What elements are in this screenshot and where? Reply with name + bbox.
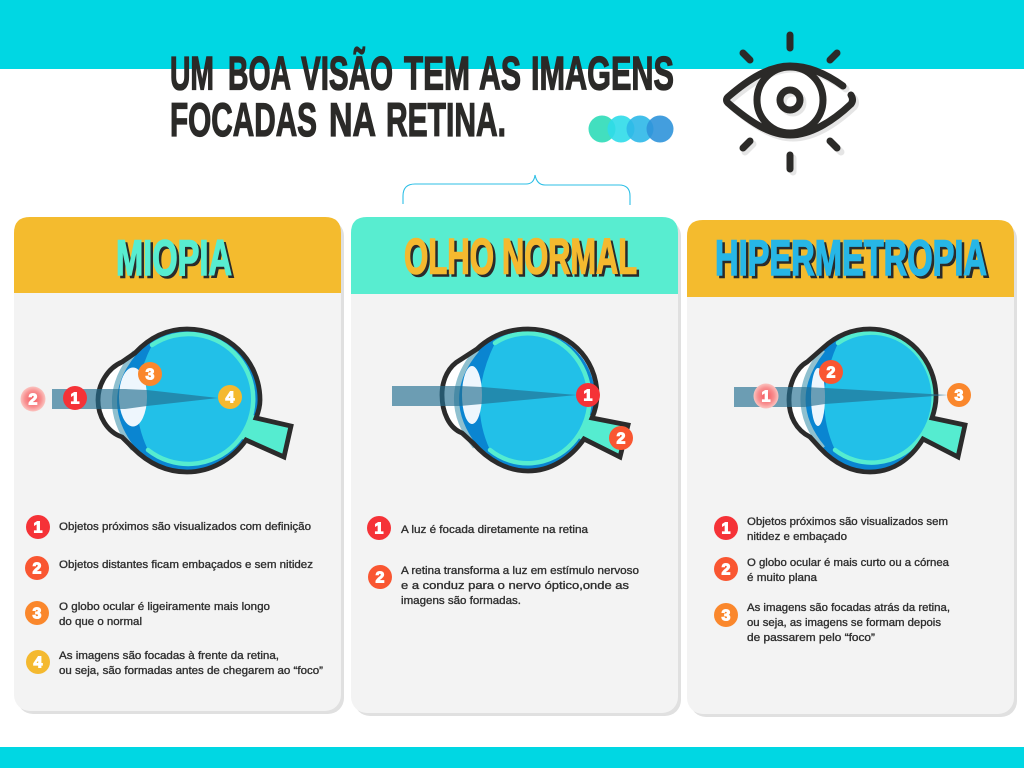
heading: miopia: MIOPIA xyxy=(116,230,232,286)
legend item 3: de passarem pelo “foco” xyxy=(747,632,875,644)
marker 2: 2 xyxy=(827,364,836,382)
marker 3 xyxy=(947,383,971,407)
legend item 1 xyxy=(714,516,948,543)
legend item 4 xyxy=(26,650,323,677)
legend item 2: O globo ocular é mais curto ou a córnea xyxy=(747,557,950,569)
heading: miopia: MIOPIA xyxy=(118,232,234,288)
legend item 1: Objetos próximos são visualizados com definição xyxy=(59,521,311,533)
legend item 3: do que o normal xyxy=(59,616,142,628)
legend item 2: e a conduz para o nervo óptico,onde as xyxy=(401,580,630,592)
top band xyxy=(0,0,1024,69)
decorative dots xyxy=(588,116,674,142)
legend item 3: As imagens são focadas atrás da retina, xyxy=(747,602,950,614)
marker 2 xyxy=(609,426,633,450)
legend item 2: 2 xyxy=(33,560,42,578)
legend item 2: 2 xyxy=(376,570,385,586)
brace over normal eye panel xyxy=(403,175,630,205)
blurred marker 1: 1 xyxy=(762,388,771,406)
legend item 2: A retina transforma a luz em estímulo nervoso xyxy=(401,565,639,577)
legend item 3: 3 xyxy=(722,608,731,624)
eye diagram: hipermetropia xyxy=(734,329,971,472)
marker 4 xyxy=(218,385,242,409)
legend item 2 xyxy=(714,557,950,584)
legend item 3 xyxy=(25,601,270,628)
title: RETINA. xyxy=(386,93,506,146)
heading: olho normal xyxy=(404,228,640,287)
legend item 2: é muito plana xyxy=(747,572,818,584)
panel: miopia xyxy=(14,217,344,714)
marker 1: 1 xyxy=(584,388,593,404)
legend item 3: ou seja, as imagens se formam depois xyxy=(747,617,942,629)
marker 1 xyxy=(576,383,600,407)
marker 3 xyxy=(138,362,162,386)
legend item 3 xyxy=(714,602,950,644)
title: BOA xyxy=(228,46,291,100)
legend item 1: 1 xyxy=(375,520,384,538)
legend item 2: Objetos distantes ficam embaçados e sem nitidez xyxy=(59,559,313,571)
title: IMAGENS xyxy=(531,46,674,100)
eye diagram: miopia xyxy=(20,329,291,472)
blurred marker 1 xyxy=(754,384,778,408)
icon: eye xyxy=(726,35,856,172)
legend item 4: 4 xyxy=(34,654,43,672)
panel header: miopia xyxy=(14,217,341,293)
panel: olho normal xyxy=(351,217,681,716)
legend item 2: imagens são formadas. xyxy=(401,595,521,607)
title: VISÃO xyxy=(301,46,393,100)
legend item 1 xyxy=(26,515,311,539)
panel header: hipermetropia xyxy=(687,220,1014,297)
marker 3: 3 xyxy=(955,388,964,404)
eye diagram: normal xyxy=(392,329,633,471)
legend item 4: ou seja, são formadas antes de chegarem ao “foco” xyxy=(59,665,323,677)
title: NA xyxy=(329,93,376,146)
legend item 1: 1 xyxy=(34,520,43,536)
title: UM xyxy=(170,46,214,100)
panel: hipermetropia xyxy=(687,220,1017,717)
title: TEM xyxy=(404,46,470,100)
blurred marker 2: 2 xyxy=(29,392,38,408)
legend item 3: O globo ocular é ligeiramente mais longo xyxy=(59,601,270,613)
legend item 2 xyxy=(368,565,639,607)
marker 2: 2 xyxy=(617,430,626,448)
legend item 1: Objetos próximos são visualizados sem xyxy=(747,516,948,528)
blurred marker 2 xyxy=(20,386,46,412)
panel header: olho normal xyxy=(351,217,678,294)
marker 1: 1 xyxy=(71,390,80,408)
light beam xyxy=(392,386,577,406)
light beam xyxy=(734,387,948,407)
heading: olho normal: OLHO xyxy=(406,231,496,287)
legend item 1: nitidez e embaçado xyxy=(747,531,847,543)
heading: olho normal: OLHO xyxy=(404,228,494,284)
marker 2 xyxy=(819,360,843,384)
legend item 2: 2 xyxy=(722,562,731,578)
title xyxy=(170,46,674,146)
marker 3: 3 xyxy=(146,366,155,384)
legend item 3: 3 xyxy=(33,606,42,622)
heading: olho normal: NORMAL xyxy=(502,228,637,284)
title: FOCADAS xyxy=(170,93,317,146)
legend item 1 xyxy=(367,516,589,540)
heading: olho normal: NORMAL xyxy=(504,231,640,287)
marker 1 xyxy=(63,386,87,410)
legend item 1: 1 xyxy=(722,520,731,538)
legend item 2 xyxy=(25,556,313,580)
bottom band xyxy=(0,747,1024,768)
legend item 4: As imagens são focadas à frente da retina, xyxy=(59,650,279,662)
heading: miopia xyxy=(116,230,234,288)
marker 4: 4 xyxy=(226,390,235,406)
light beam xyxy=(52,389,218,409)
legend item 1: A luz é focada diretamente na retina xyxy=(401,524,589,536)
title: AS xyxy=(479,46,521,100)
